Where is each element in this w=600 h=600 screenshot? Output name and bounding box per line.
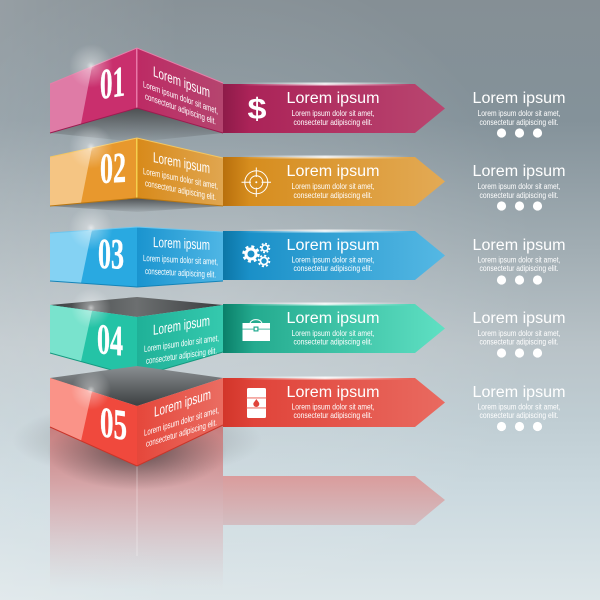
side note 04 xyxy=(472,310,566,358)
side note 05: Lorem ipsum xyxy=(472,384,566,401)
number 02: 02 xyxy=(100,145,126,193)
side note 04: Lorem ipsum xyxy=(472,310,566,327)
arrow 04 xyxy=(223,302,445,353)
arrow 05 text: consectetur adipiscing elit. xyxy=(294,411,372,420)
box 03 text: consectetur adipiscing elit. xyxy=(145,266,216,280)
arrow 04 text: Lorem ipsum xyxy=(286,310,380,327)
row 3: blue xyxy=(50,206,566,287)
side note 04: Lorem ipsum dolor sit amet, xyxy=(478,329,560,338)
number 03: 03 xyxy=(98,231,124,279)
icon: target xyxy=(242,168,271,197)
box 04 text xyxy=(144,313,219,366)
side note 05: consectetur adipiscing elit. xyxy=(480,411,558,420)
arrow 01 text xyxy=(286,90,380,127)
box 01 shadow xyxy=(50,108,223,142)
side note 02: Lorem ipsum dolor sit amet, xyxy=(478,182,560,191)
side note 05: Lorem ipsum dolor sit amet, xyxy=(478,402,560,412)
arrow 03 text: consectetur adipiscing elit. xyxy=(294,264,372,273)
box 01 text: consectetur adipiscing elit. xyxy=(145,91,216,126)
box 04 text: Lorem ipsum dolor sit amet, xyxy=(144,333,219,354)
icon: dollar: $ xyxy=(248,93,267,126)
side note 01: Lorem ipsum dolor sit amet, xyxy=(478,109,560,118)
box 05 text: Lorem ipsum dolor sit amet, xyxy=(144,405,219,438)
side note 05 xyxy=(472,384,566,431)
arrow 04 text: Lorem ipsum dolor sit amet, xyxy=(292,329,374,338)
icon: briefcase xyxy=(242,320,270,341)
arrow 01 xyxy=(223,82,445,133)
box 02 text: Lorem ipsum dolor sit amet, xyxy=(143,166,218,191)
number 01: 01 xyxy=(100,57,125,109)
arrow 03 text: Lorem ipsum dolor sit amet, xyxy=(292,256,374,264)
arrow 05 text xyxy=(286,384,380,420)
row 5: red xyxy=(50,366,566,466)
reflection of the fifth box and arrow xyxy=(12,402,445,590)
arrow 01 text: consectetur adipiscing elit. xyxy=(294,118,372,127)
side note 02 xyxy=(472,163,566,211)
box 04 text: Lorem ipsum xyxy=(153,313,210,339)
box 03 text xyxy=(143,235,218,280)
arrow 05 text: Lorem ipsum xyxy=(286,384,380,401)
box 02 text: Lorem ipsum xyxy=(153,150,210,177)
arrow 02 xyxy=(223,156,445,206)
box 02 text xyxy=(143,150,218,202)
side note 03: consectetur adipiscing elit. xyxy=(480,264,558,273)
side note 02: Lorem ipsum xyxy=(472,163,566,180)
box 03 text: Lorem ipsum xyxy=(153,235,210,254)
box 01 xyxy=(50,48,223,133)
box 04 text: consectetur adipiscing elit. xyxy=(146,345,217,366)
light flare xyxy=(69,44,113,88)
arrow 04 text xyxy=(286,310,380,346)
box 03 text: Lorem ipsum dolor sit amet, xyxy=(143,253,218,267)
arrow 03 text xyxy=(286,237,380,273)
side note 03: Lorem ipsum xyxy=(472,237,566,254)
light flare xyxy=(69,125,113,169)
arrow 02 text xyxy=(286,163,380,200)
side note 01: consectetur adipiscing elit. xyxy=(480,118,558,127)
light flare xyxy=(69,206,113,250)
side note 01 xyxy=(472,90,566,138)
box 05 text: consectetur adipiscing elit. xyxy=(146,417,217,449)
arrow 01 text: Lorem ipsum xyxy=(286,90,380,107)
box 05 text: Lorem ipsum xyxy=(154,387,211,421)
number 05: 05 xyxy=(100,398,127,450)
arrow 02 text: Lorem ipsum xyxy=(286,163,380,180)
arrow 03 text: Lorem ipsum xyxy=(286,237,380,254)
row 4: teal xyxy=(50,288,566,377)
arrow 05 xyxy=(223,376,445,427)
arrow 05 text: Lorem ipsum dolor sit amet, xyxy=(292,402,374,412)
icon: oil barrel xyxy=(246,388,267,418)
arrow 02 text: Lorem ipsum dolor sit amet, xyxy=(292,182,374,191)
arrow 01 text: Lorem ipsum dolor sit amet, xyxy=(292,109,374,118)
icon: gears xyxy=(244,244,270,266)
box 05 text xyxy=(144,387,219,449)
side note 03: Lorem ipsum dolor sit amet, xyxy=(478,256,560,264)
box 03 xyxy=(50,227,223,287)
box 05 xyxy=(50,366,223,466)
box 02 shadow xyxy=(50,198,223,212)
box 04 xyxy=(50,297,223,377)
side note 03 xyxy=(472,237,566,285)
arrow 03 xyxy=(223,230,445,280)
row 1: pink xyxy=(50,44,566,142)
box 02 text: consectetur adipiscing elit. xyxy=(145,178,216,202)
number 04: 04 xyxy=(97,316,123,366)
box 01 text: Lorem ipsum dolor sit amet, xyxy=(143,79,218,116)
box 02 xyxy=(50,138,223,206)
box 01 text xyxy=(143,63,218,126)
side note 01: Lorem ipsum xyxy=(472,90,566,107)
light flare xyxy=(71,370,111,410)
arrow 04 text: consectetur adipiscing elit. xyxy=(294,338,372,346)
side note 04: consectetur adipiscing elit. xyxy=(480,338,558,346)
light flare xyxy=(71,288,111,328)
row 2: orange xyxy=(50,125,566,212)
arrow 02 text: consectetur adipiscing elit. xyxy=(294,191,372,200)
side note 02: consectetur adipiscing elit. xyxy=(480,191,558,200)
box 01 text: Lorem ipsum xyxy=(153,63,210,102)
